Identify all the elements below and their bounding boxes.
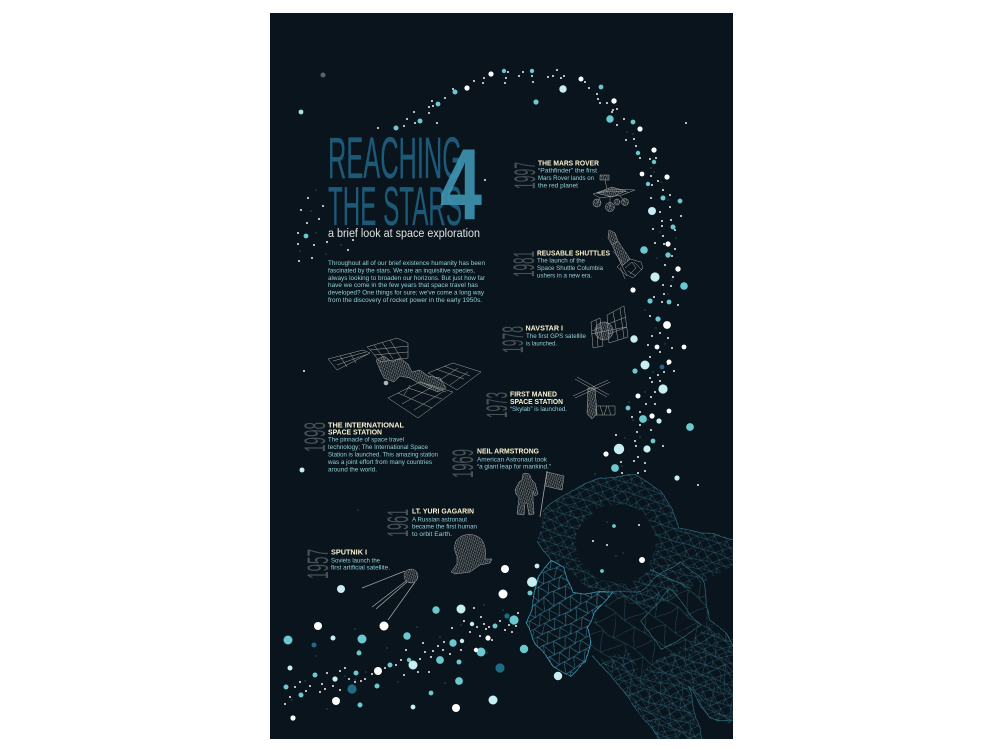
description xyxy=(537,258,603,280)
heading: SPUTNIK I xyxy=(331,550,367,556)
astronaut body base mesh xyxy=(563,567,740,745)
description: The launch of the xyxy=(537,258,585,264)
description: is launched. xyxy=(526,340,557,348)
description xyxy=(327,436,438,474)
description: Soviets launch the xyxy=(331,558,380,564)
icon: navstar satellite xyxy=(591,306,628,348)
description: first artificial satellite. xyxy=(331,564,390,572)
text: 1957 xyxy=(302,549,335,579)
astronaut glove mesh xyxy=(525,560,613,677)
description: was a joint effort from many countries xyxy=(327,459,432,466)
poster background xyxy=(270,13,733,739)
heading: THE INTERNATIONAL xyxy=(328,422,405,430)
icon: skylab xyxy=(573,377,615,419)
big numeral four: 4 xyxy=(440,129,482,241)
heading: NAVSTAR I xyxy=(526,326,563,332)
milestone: first maned space station 1973: 1973 xyxy=(481,392,514,418)
heading: SPACE STATION xyxy=(510,399,563,406)
description: the red planet xyxy=(538,182,578,190)
milestone: mars rover 1997 xyxy=(509,160,635,212)
milestone: reusable shuttles 1981 xyxy=(508,230,643,280)
intro paragraph: always looking to broaden our horizons. But just how far xyxy=(328,275,486,282)
description: Station is launched. This amazing station xyxy=(328,452,438,458)
description: Mars Rover lands on xyxy=(538,175,594,182)
large teal stars xyxy=(284,69,694,708)
heading: NEIL ARMSTRONG xyxy=(477,448,540,456)
small dim stars xyxy=(292,132,676,709)
milestone: international space station 1998 xyxy=(299,338,481,474)
description xyxy=(331,558,390,572)
text: 1969 xyxy=(447,449,480,478)
description xyxy=(538,168,597,190)
description xyxy=(477,456,551,470)
icon: astronaut and flag xyxy=(515,471,564,517)
description: Space Shuttle Columbia xyxy=(537,265,603,272)
milestone: neil armstrong 1969 xyxy=(447,448,564,517)
title: THE STARS xyxy=(328,175,462,237)
text: 1997 xyxy=(509,162,542,189)
icon: international space station xyxy=(328,338,481,418)
heading: LT. YURI GAGARIN xyxy=(412,508,474,516)
heading xyxy=(510,392,563,406)
large pale stars xyxy=(288,85,680,709)
description: ushers in a new era. xyxy=(537,272,592,280)
astronaut outlines xyxy=(537,475,733,740)
description: “Pathfinder” the first xyxy=(538,168,597,174)
description: “a giant leap for mankind.” xyxy=(477,464,551,470)
milestone: navstar 1978: 1978 xyxy=(497,326,530,353)
description: became the first human xyxy=(412,524,477,530)
milestone: first maned space station 1973 xyxy=(481,377,615,419)
icon: space shuttle xyxy=(608,230,643,279)
description: The pinnacle of space travel xyxy=(328,436,404,444)
astronaut leg and lower body mesh xyxy=(600,625,740,745)
star field xyxy=(284,69,698,721)
heading: REUSABLE SHUTTLES xyxy=(537,250,610,258)
intro paragraph: from the discovery of rocket power in the early 1950s. xyxy=(328,297,482,304)
description xyxy=(412,516,477,538)
description: technology; The International Space xyxy=(328,444,428,451)
icon: mars rover xyxy=(593,175,635,212)
heading xyxy=(328,422,405,436)
intro paragraph: fascinated by the stars. We are an inquisitive species, xyxy=(328,268,475,274)
description: “Skylab” is launched. xyxy=(510,406,567,413)
intro paragraph: developed? One things for sure; we've come a long way xyxy=(328,290,485,296)
heading: SPACE STATION xyxy=(328,430,382,436)
text: 1961 xyxy=(382,509,415,537)
intro paragraph: have we come in the few years that space travel has xyxy=(328,282,478,289)
grey star xyxy=(320,72,326,78)
title: REACHING xyxy=(328,126,462,191)
small white stars xyxy=(285,70,698,704)
milestone: reusable shuttles 1981: 1981 xyxy=(508,251,541,277)
description: A Russian astronaut xyxy=(412,516,467,524)
milestone: sputnik 1957 xyxy=(302,549,418,620)
wireframe astronaut xyxy=(525,475,740,745)
astronaut helmet and arm mesh xyxy=(537,475,740,610)
intro paragraph xyxy=(328,260,486,304)
intro paragraph: Throughout all of our brief existence humanity has been xyxy=(328,260,485,267)
heading: FIRST MANED xyxy=(510,392,557,398)
subtitle: a brief look at space exploration xyxy=(328,226,480,240)
icon: gagarin helmet xyxy=(451,534,492,574)
icon: sputnik xyxy=(362,569,418,620)
description: American Astronaut took xyxy=(477,456,548,464)
large white stars xyxy=(290,71,686,721)
glove outline xyxy=(525,560,613,677)
heading: THE MARS ROVER xyxy=(538,160,599,168)
milestone: international space station 1998: 1998 xyxy=(299,422,332,452)
description xyxy=(526,333,586,348)
milestone: yuri gagarin 1961 xyxy=(382,508,492,574)
dark blue stars xyxy=(312,365,664,694)
title xyxy=(328,126,482,241)
description: to orbit Earth. xyxy=(412,531,452,538)
description: around the world. xyxy=(328,466,377,474)
milestone: navstar 1978 xyxy=(497,306,628,353)
description: The first GPS satellite xyxy=(526,333,586,340)
